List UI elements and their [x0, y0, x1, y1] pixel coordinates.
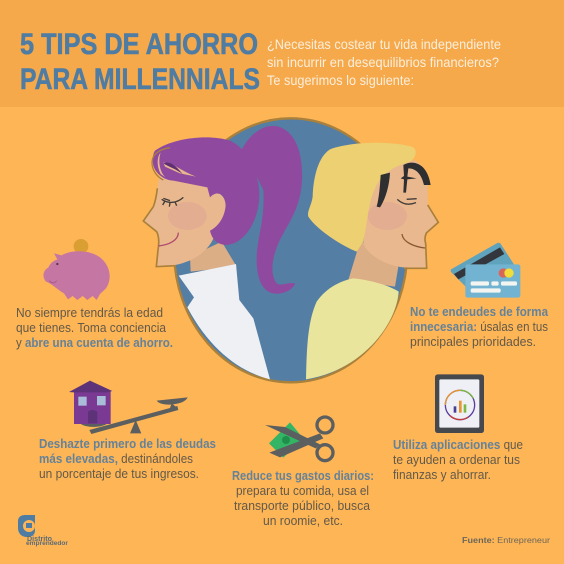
text: savings tip: que tienes. Toma conciencia [16, 320, 167, 335]
title: PARA MILLENNIALS [20, 63, 260, 96]
central portrait illustration [143, 118, 438, 382]
hair outline [152, 148, 170, 180]
text: daily spending tip: prepara tu comida, usa el [236, 483, 369, 498]
text: debt tip: Deshazte primero de las deudas [39, 436, 216, 451]
text: daily spending tip [232, 468, 374, 528]
intro text: ¿Necesitas costear tu vida independiente [267, 36, 501, 52]
smile [158, 233, 178, 246]
text: apps tip: Utiliza aplicaciones que [393, 437, 523, 452]
logo: Distrito Emprendedor [18, 515, 68, 547]
fringe strand [163, 163, 196, 177]
closed eye [397, 199, 417, 204]
intro text [267, 36, 501, 88]
logo: Distrito Emprendedor: Distrito [27, 536, 52, 543]
text: daily spending tip: un roomie, etc. [263, 513, 343, 528]
icon: tablet with chart [435, 374, 484, 433]
text: daily spending tip: transporte público, busca [234, 498, 371, 513]
cheek blush [168, 202, 207, 230]
text: daily spending tip: Reduce tus gastos diarios: [232, 468, 374, 483]
text: savings tip [16, 305, 173, 350]
icon: scissors cutting a banknote [265, 417, 333, 461]
text: apps tip: te ayuden a ordenar tus [393, 452, 520, 467]
ear [210, 194, 226, 230]
closed eye [162, 197, 183, 207]
logo: Distrito Emprendedor: emprendedor [26, 540, 68, 547]
text: apps tip [393, 437, 523, 482]
text: credit tip: No te endeudes de forma [410, 304, 549, 319]
text: debt tip [39, 436, 216, 481]
neck [190, 242, 237, 272]
icon: house on seesaw [69, 381, 188, 434]
title [20, 28, 260, 96]
intro text: sin incurrir en desequilibrios financieros? [267, 54, 499, 70]
white jacket [179, 264, 270, 379]
source credit: Fuente: Entrepreneur [462, 536, 550, 545]
text: debt tip: más elevadas, destinándoles [39, 451, 193, 466]
yellow sweater [306, 278, 399, 379]
text: apps tip: finanzas y ahorrar. [393, 467, 491, 482]
face [363, 160, 437, 267]
face profile outline [404, 205, 438, 268]
text: credit tip [410, 304, 549, 349]
face profile outline [143, 188, 175, 267]
text: savings tip: y abre una cuenta de ahorro. [16, 335, 173, 350]
cheek blush [368, 202, 407, 230]
blond hair [308, 143, 416, 252]
hair [153, 137, 259, 245]
title: 5 TIPS DE AHORRO [20, 28, 258, 61]
icon: credit cards [451, 243, 520, 298]
oval background [174, 118, 407, 382]
neck [348, 242, 400, 287]
man [306, 143, 438, 379]
face [144, 173, 225, 266]
icon: piggy bank [44, 239, 110, 300]
text: credit tip: innecesaria: úsalas en tus [410, 319, 548, 334]
header band [0, 0, 564, 107]
ponytail [242, 126, 302, 294]
text: credit tip: principales prioridades. [410, 334, 536, 349]
text: savings tip: No siempre tendrás la edad [16, 305, 163, 320]
text: debt tip: un porcentaje de tus ingresos. [39, 466, 199, 481]
dark hair [377, 173, 390, 207]
woman [143, 126, 302, 379]
smile [402, 234, 425, 248]
intro text: Te sugerimos lo siguiente: [267, 72, 414, 88]
